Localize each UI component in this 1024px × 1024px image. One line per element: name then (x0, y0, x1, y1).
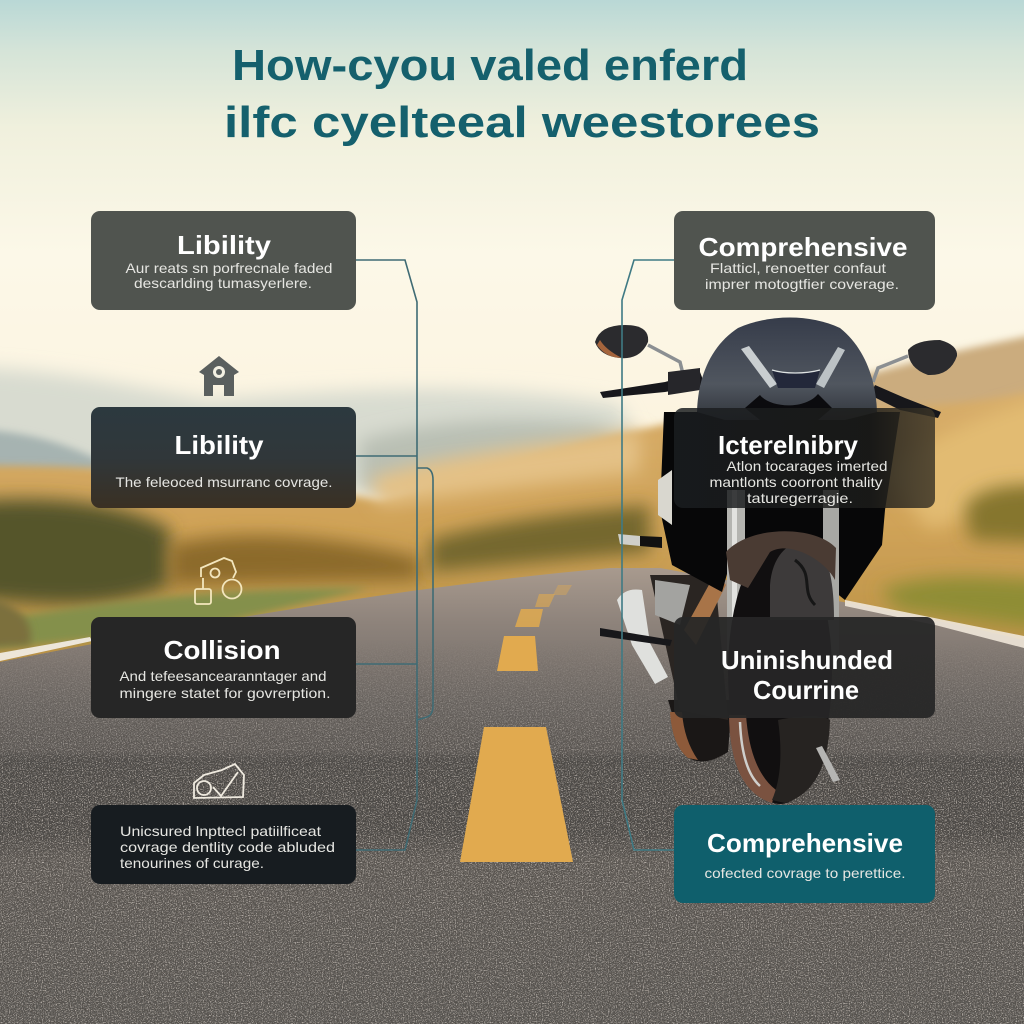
panel: Libility middle: Libility (174, 430, 264, 460)
panel: Icterelnibry: Atlon tocarages imerted (726, 458, 888, 474)
title: How-cyou valed enferd (232, 41, 748, 90)
icon: house (199, 356, 239, 396)
panel: Comprehensive teal (674, 805, 935, 903)
panel: Comprehensive teal: Comprehensive (707, 828, 903, 858)
connector lines: right (622, 260, 674, 850)
front tyre (728, 540, 832, 804)
panel: Comprehensive top (674, 211, 935, 310)
road surface (0, 560, 1024, 1024)
panel: Collision: Collision (164, 635, 280, 665)
panel: Uninishunded: Uninishunded (721, 645, 893, 675)
title (224, 41, 820, 147)
front fender (726, 531, 836, 588)
panel: Libility top (91, 211, 356, 310)
panel: Libility top: Libility (177, 230, 272, 260)
forks (727, 490, 839, 665)
panel: Uninsured: covrage dentlity code abluded (120, 839, 335, 855)
panel: Uninsured (91, 805, 356, 884)
panel: Collision (91, 617, 356, 718)
rear wheel (668, 700, 732, 762)
panel: Collision: mingere statet for govrerption. (120, 685, 330, 701)
panel: Uninsured: Unicsured lnpttecl patiilficeat (120, 823, 321, 839)
road centre dashes (460, 585, 573, 862)
background: sky (0, 0, 1024, 640)
panel: Icterelnibry: Icterelnibry (718, 430, 859, 460)
fairing (697, 318, 877, 420)
engine body (660, 412, 900, 600)
panel: Comprehensive top: imprer motogtfier coverage. (705, 276, 899, 292)
icon: car with check (194, 764, 244, 798)
headlights (741, 346, 777, 388)
title: ilfc cyelteeal weestorees (224, 98, 820, 147)
panel: Uninsured: tenourines of curage. (120, 855, 264, 871)
panel: Icterelnibry (674, 408, 935, 508)
icon: collision (195, 558, 242, 604)
panel: Comprehensive top: Comprehensive (698, 232, 908, 262)
panel: Icterelnibry: mantlonts coorront thality (710, 474, 882, 490)
panel: Libility top: Aur reats sn porfrecnale faded (126, 260, 332, 276)
background: hills and fields (0, 325, 1024, 680)
connector lines: left (356, 260, 433, 850)
panel: Libility middle (91, 407, 356, 508)
panel: Libility top: descarlding tumasyerlere. (134, 275, 312, 291)
panel: Uninishunded: Courrine (753, 675, 859, 705)
panel: Icterelnibry: taturegerragie. (747, 490, 853, 506)
panel: Libility middle: The feleoced msurranc covrage. (116, 474, 332, 490)
panel: Comprehensive teal: cofected covrage to perettice. (704, 865, 906, 881)
exhaust and footpeg (600, 572, 728, 720)
panel: Comprehensive top: Flatticl, renoetter confaut (710, 260, 886, 276)
kickstand (816, 746, 840, 782)
mirrors and handlebars (595, 325, 957, 418)
panel: Uninishunded (674, 617, 935, 718)
panel: Collision: And tefeesancearanntager and (120, 668, 326, 684)
motorcycle (595, 318, 957, 804)
